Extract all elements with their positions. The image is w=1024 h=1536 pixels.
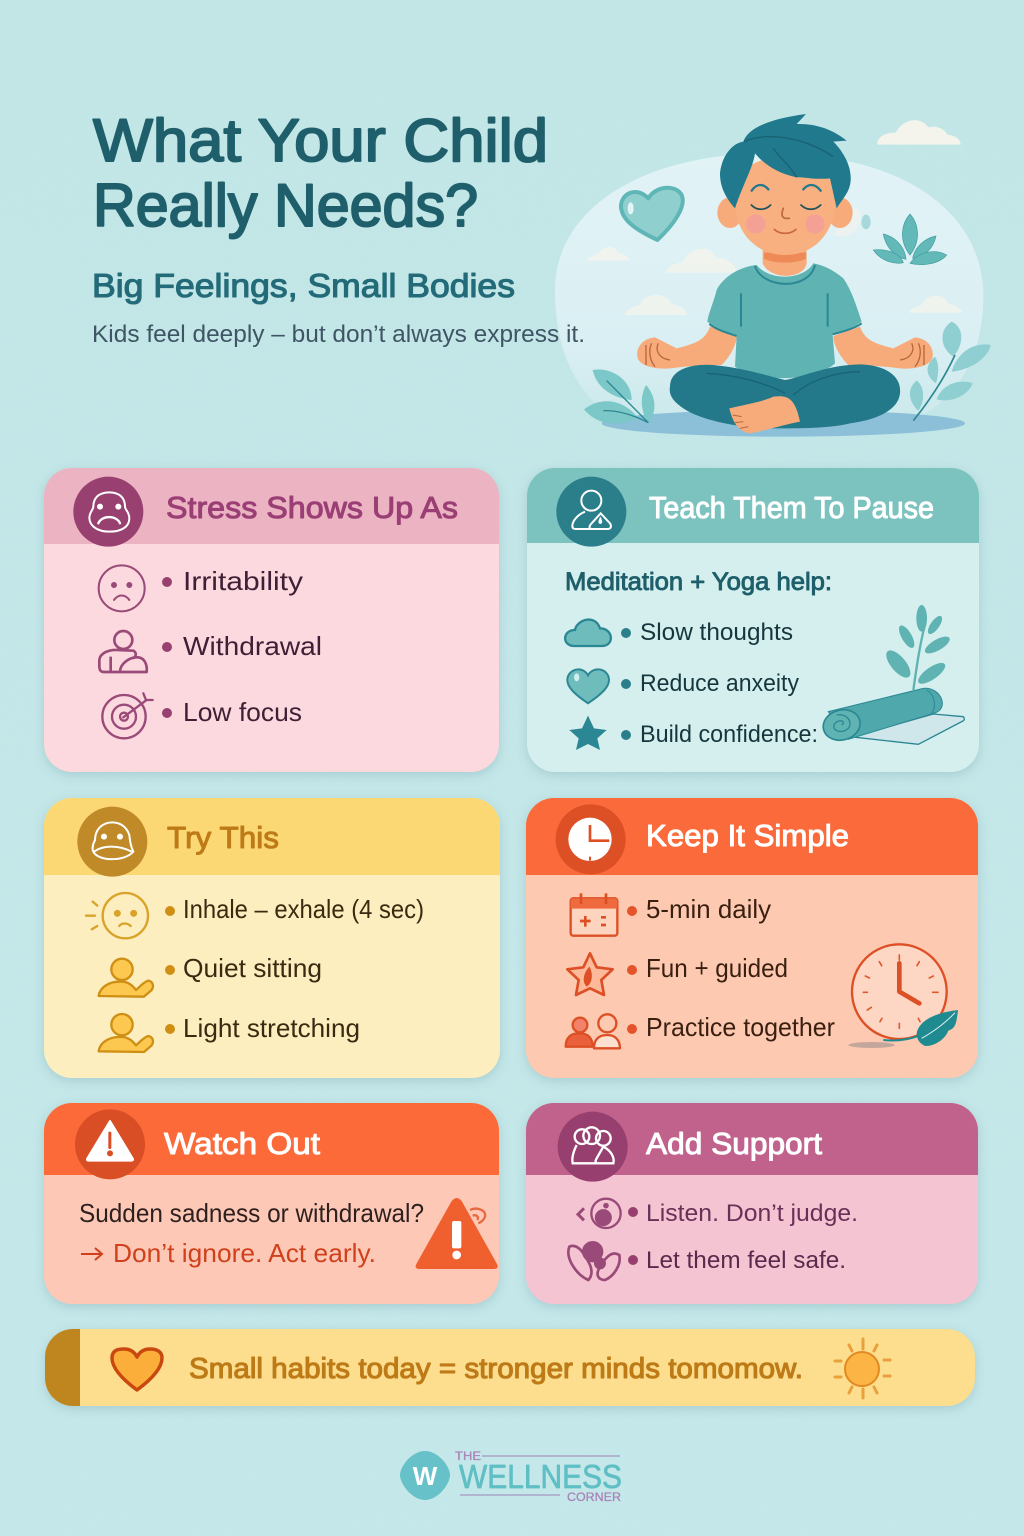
illustration: meditating child xyxy=(555,114,991,437)
panel body xyxy=(526,798,978,1078)
cheeks xyxy=(746,214,765,234)
closing text: Small habits today = stronger minds tomomow. xyxy=(189,1353,803,1385)
banner: closing message xyxy=(45,1329,975,1406)
icon: sun xyxy=(835,1339,890,1398)
ground shadow xyxy=(602,410,965,437)
item: inhale exhale: Inhale – exhale (4 sec) xyxy=(183,894,424,924)
foot xyxy=(729,396,800,433)
logo letter: W xyxy=(413,1461,438,1491)
icon: frown xyxy=(99,565,145,611)
heading: Try This xyxy=(167,820,279,855)
panel header xyxy=(526,1103,978,1175)
icon: withdrawn person xyxy=(99,631,147,672)
icon: warning badge xyxy=(75,1109,145,1179)
item: 5-min daily: 5-min daily xyxy=(646,894,771,924)
item: let them feel safe: Let them feel safe. xyxy=(646,1247,846,1274)
hero title: Really Needs? xyxy=(93,172,478,239)
panel header xyxy=(526,798,978,875)
icon: stretching person xyxy=(99,1014,153,1052)
illustration: clock with leaf xyxy=(848,944,958,1048)
panel: keep it simple xyxy=(526,798,978,1078)
icon: breathing face xyxy=(86,893,148,938)
arms xyxy=(637,327,933,369)
panel body xyxy=(44,1103,499,1304)
ears xyxy=(717,197,743,228)
clouds xyxy=(587,120,963,315)
icon: star xyxy=(569,716,607,750)
panel: add support xyxy=(526,1103,978,1304)
banner background xyxy=(45,1329,975,1406)
panel body xyxy=(44,468,499,772)
wordmark xyxy=(455,1449,622,1504)
item: irritability: Irritability xyxy=(183,566,303,596)
panel: teach them to pause xyxy=(527,468,979,772)
icon: caring hands xyxy=(568,1242,620,1280)
icon: seated person xyxy=(99,959,153,997)
arrow xyxy=(81,1248,102,1260)
face xyxy=(734,157,836,255)
hero title xyxy=(93,107,548,239)
shirt seams xyxy=(709,265,862,336)
icon: star xyxy=(567,953,613,995)
item: light stretching: Light stretching xyxy=(183,1013,360,1043)
icon: heart xyxy=(112,1349,162,1390)
illustration: yoga mat and plant xyxy=(820,605,964,744)
panel: stress shows up as xyxy=(44,468,499,772)
right branch xyxy=(910,322,991,421)
neck xyxy=(763,247,807,276)
call to action text: Don’t ignore. Act early. xyxy=(113,1238,376,1268)
panel body xyxy=(44,798,500,1078)
icon: calendar xyxy=(571,893,617,936)
icon: large warning triangle xyxy=(416,1198,498,1269)
trousers xyxy=(670,364,900,428)
panel body xyxy=(526,1103,978,1304)
icon: sad face badge xyxy=(73,477,143,547)
shirt xyxy=(707,263,862,378)
item: listen: Listen. Don’t judge. xyxy=(646,1200,858,1227)
panel: try this xyxy=(44,798,500,1078)
banner accent xyxy=(45,1329,80,1406)
panel header xyxy=(527,468,979,543)
wordmark: CORNER xyxy=(567,1490,621,1504)
icon: face badge xyxy=(77,807,147,877)
icon: target xyxy=(102,693,153,738)
item: slow thoughts: Slow thoughts xyxy=(640,619,793,646)
wordmark: THE xyxy=(455,1449,481,1463)
item: reduce anxiety: Reduce anxeity xyxy=(640,670,800,697)
logo mark xyxy=(400,1451,450,1500)
background bubble xyxy=(555,153,983,420)
heading: Teach Them To Pause xyxy=(649,490,934,525)
icon: heart xyxy=(567,669,609,703)
lotus leaves xyxy=(873,214,947,265)
panel header xyxy=(44,468,499,544)
item: withdrawal: Withdrawal xyxy=(183,631,322,661)
heading: Stress Shows Up As xyxy=(166,490,458,525)
item: fun + guided: Fun + guided xyxy=(646,953,788,983)
heading: Watch Out xyxy=(164,1126,320,1161)
icon: person badge xyxy=(556,477,626,547)
item: low focus: Low focus xyxy=(183,697,302,727)
floating heart xyxy=(621,188,683,240)
panel header xyxy=(44,1103,499,1175)
question text: Sudden sadness or withdrawal? xyxy=(79,1198,424,1228)
icon: cloud xyxy=(565,620,611,646)
panel body xyxy=(527,468,979,772)
logo: the wellness corner xyxy=(400,1449,622,1504)
wordmark: WELLNESS xyxy=(459,1458,622,1495)
subheading: Meditation + Yoga help: xyxy=(565,568,832,596)
icon: clock badge xyxy=(556,804,626,874)
panel: watch out xyxy=(44,1103,499,1304)
heading: Keep It Simple xyxy=(646,818,849,853)
item: quiet sitting: Quiet sitting xyxy=(183,953,322,983)
hair xyxy=(720,114,851,208)
thought drop xyxy=(861,215,871,229)
intro text: Kids feel deeply – but don’t always express it. xyxy=(92,321,585,348)
panel header xyxy=(44,798,500,875)
subtitle: Big Feelings, Small Bodies xyxy=(92,267,515,304)
icon: listening xyxy=(578,1199,621,1228)
icon: two people xyxy=(566,1014,620,1048)
facial features xyxy=(751,185,821,233)
heading: Add Support xyxy=(646,1126,822,1161)
left leaves xyxy=(584,369,654,424)
hero title: What Your Child xyxy=(93,107,548,174)
icon: people badge xyxy=(558,1112,628,1182)
item: build confidence: Build confidence: xyxy=(640,721,818,748)
item: practice together: Practice together xyxy=(646,1012,835,1042)
